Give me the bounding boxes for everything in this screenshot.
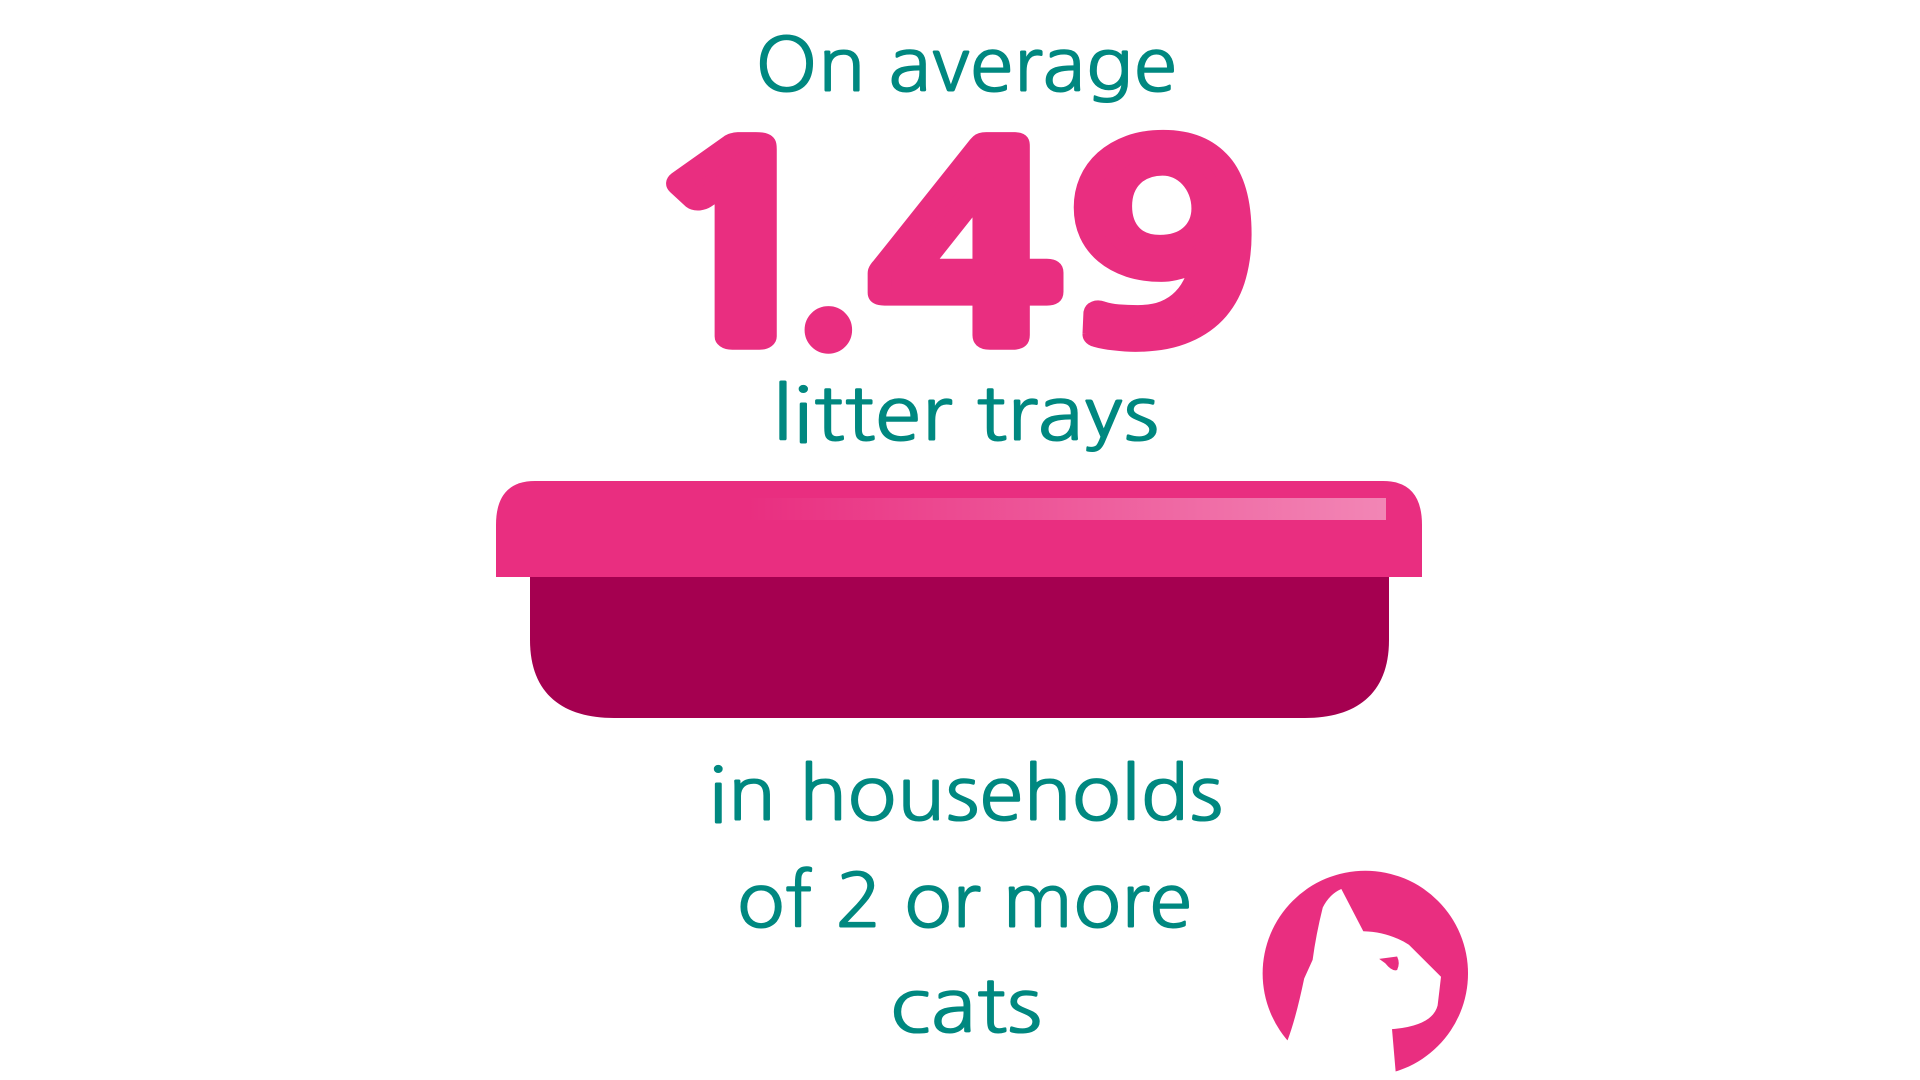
text: of 2 or more: of 2 or more (737, 864, 1192, 938)
text: cats: cats (890, 969, 1042, 1043)
rim highlight (747, 498, 1386, 520)
cat silhouette (1287, 889, 1441, 1080)
circle (1263, 871, 1468, 1076)
icon: litter tray (496, 481, 1422, 718)
big number: 1.49: 49 (871, 120, 1257, 378)
cat eye (1379, 957, 1399, 970)
big number: 1.49: . (800, 181, 855, 359)
tray rim (496, 481, 1422, 577)
icon: cat in circle (1263, 871, 1468, 1080)
text: On average: On average (755, 28, 1177, 102)
text: litter trays: litter trays (772, 377, 1159, 451)
big number: 1.49: 1 (636, 120, 841, 378)
big number: 1.49 (636, 120, 1257, 378)
text: in households: in households (708, 757, 1223, 831)
tray body (530, 575, 1389, 718)
